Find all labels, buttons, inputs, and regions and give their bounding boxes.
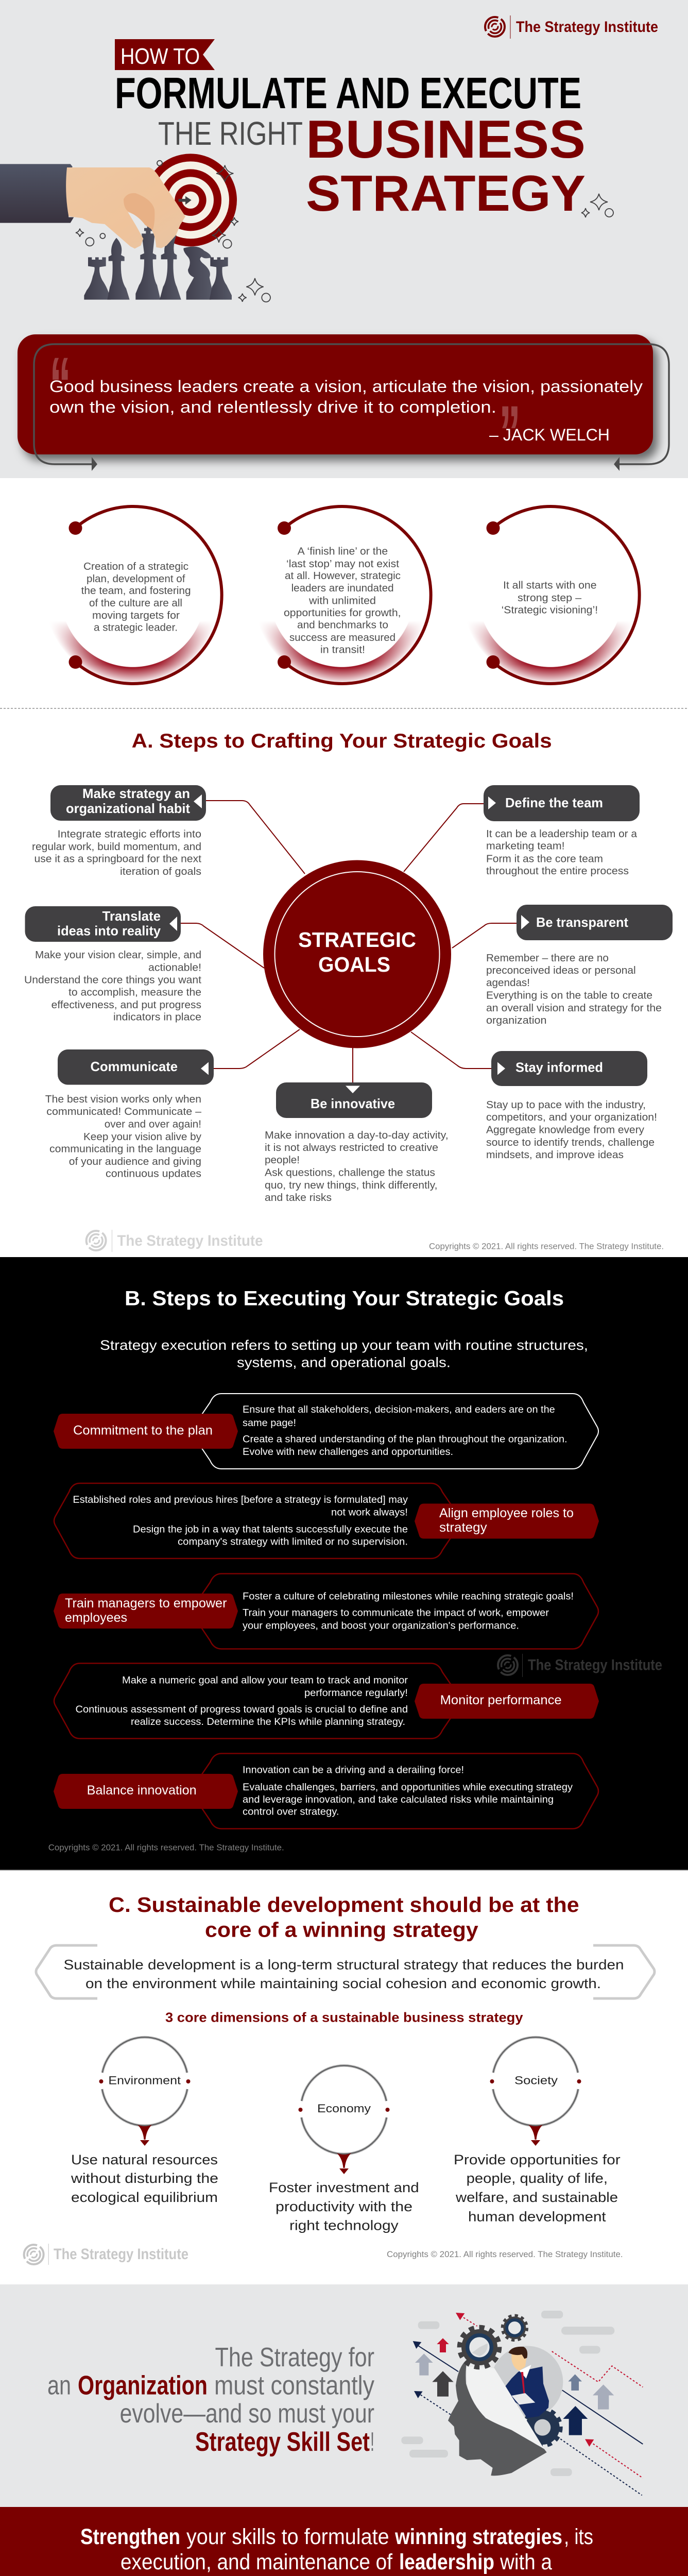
step: be innovative: and take risks: [265, 1192, 332, 1204]
step: communicate: Communicate: [91, 1059, 178, 1074]
man: [499, 2347, 549, 2418]
circle 2: finish line: A ‘finish line’ or the: [298, 546, 388, 557]
step: make strategy an organizational habit: iteration of goals: [120, 866, 201, 877]
heading: section C: C. Sustainable development should be at the: [109, 1893, 579, 1917]
dimension: environment: ecological equilibrium: [71, 2190, 218, 2205]
watermark logo C: The Strategy Institute: [54, 2246, 188, 2263]
intro text: systems, and operational goals.: [237, 1355, 451, 1370]
row: balance innovation: and leverage innovation, and take calculated risks while maintaining: [243, 1794, 554, 1805]
gears upper: [459, 2327, 500, 2367]
step: be transparent: Everything is on the table to create: [486, 990, 652, 1002]
step: be transparent: Be transparent: [536, 914, 628, 930]
dimension: economy: Economy: [317, 2102, 371, 2115]
row: align employee roles to strategy: company's strategy with limited or no supervision.: [178, 1536, 408, 1547]
row: balance innovation: Innovation can be a driving and a derailing force!: [243, 1765, 464, 1776]
circle 1: strategic leader: [44, 506, 222, 684]
step: make strategy an organizational habit: Make strategy an: [82, 786, 190, 801]
up arrows: [437, 2338, 449, 2352]
dimension: environment: without disturbing the: [71, 2171, 218, 2186]
step: make strategy an organizational habit: organizational habit: [66, 801, 190, 816]
heading: section C: [109, 1893, 579, 1941]
step: define the team: Define the team: [505, 795, 603, 810]
sparkles: [76, 161, 270, 302]
illustration: hand moving chess piece with target: [0, 154, 270, 302]
row: align employee roles to strategy: Established roles and previous hires [before a strategy is formulated] may: [73, 1495, 408, 1505]
circle 1: strategic leader: of the culture are all: [89, 598, 182, 609]
step: communicate: Keep your vision alive by: [83, 1131, 201, 1143]
dimension: economy: productivity with the: [276, 2199, 412, 2214]
panel: call to action: winning strategies: [394, 2524, 562, 2549]
step: define the team: Form it as the core team: [486, 853, 603, 865]
panel: call to action: execution, and maintenance of: [121, 2550, 393, 2574]
header panel: [0, 0, 688, 478]
row: align employee roles to strategy: strategy: [439, 1520, 487, 1535]
row: commitment to the plan: Commitment to the plan: [73, 1423, 213, 1438]
step: be transparent: Remember – there are no: [486, 953, 609, 964]
icon: chess pieces: [84, 225, 232, 300]
logo: The Strategy Institute: The Strategy Institute: [516, 19, 658, 36]
circle 2: finish line: and benchmarks to: [297, 620, 388, 631]
logo: The Strategy Institute: [485, 15, 658, 39]
callout: sustainable development definition: on the environment while maintaining social cohesion and economic growth.: [85, 1976, 601, 1991]
row: train managers to empower employees: your employees, and boost your organization's performance.: [243, 1621, 519, 1632]
dimension: economy: right technology: [289, 2217, 399, 2233]
step: translate ideas into reality: Translate: [102, 908, 161, 924]
row: commitment to the plan: Ensure that all stakeholders, decision-makers, and eaders are on the: [243, 1404, 555, 1415]
step: communicate: The best vision works only when: [45, 1094, 201, 1105]
circle 3: strategic visioning: ‘Strategic visioning’!: [502, 605, 598, 616]
evolve text: must constantly: [214, 2371, 374, 2401]
watermark logo A: [87, 1230, 263, 1252]
step: define the team: throughout the entire process: [486, 866, 629, 877]
row: commitment to the plan: Create a shared understanding of the plan throughout the organization.: [243, 1434, 567, 1445]
step: communicate: communicated! Communicate –: [46, 1106, 202, 1117]
step: communicate: of your audience and giving: [69, 1156, 201, 1167]
callout: sustainable development definition: [36, 1945, 655, 1998]
panel: call to action: [0, 2507, 688, 2576]
step: define the team: It can be a leadership team or a: [486, 828, 638, 840]
row: monitor performance: Continuous assessment of progress toward goals is crucial to define and: [75, 1704, 408, 1715]
watermark logo C: [24, 2244, 188, 2265]
quote panel: ”: [499, 389, 521, 476]
intro text: [100, 1337, 588, 1370]
panel: call to action: with a: [500, 2550, 552, 2574]
subheading: 3 core dimensions: 3 core dimensions of a sustainable business strategy: [165, 2010, 523, 2025]
circle 2: finish line: success are measured: [289, 632, 395, 643]
evolve text: Organization: [78, 2371, 208, 2401]
quote text: Good business leaders create a vision, articulate the vision, passionately: [49, 377, 643, 396]
step: translate ideas into reality: actionable!: [148, 962, 201, 973]
step: define the team: [484, 785, 640, 877]
step: be innovative: quo, try new things, think differently,: [265, 1180, 438, 1191]
row: train managers to empower employees: Train your managers to communicate the impact of work, empower: [243, 1608, 549, 1619]
circle 1: strategic leader: a strategic leader.: [94, 622, 178, 634]
dimension: society: human development: [468, 2209, 606, 2225]
row: commitment to the plan: same page!: [243, 1418, 296, 1429]
circle 1: strategic leader: plan, development of: [87, 573, 185, 585]
step: communicate: over and over again!: [105, 1119, 201, 1130]
circle 2: finish line: leaders are inundated: [291, 583, 394, 594]
step: be transparent: organization: [486, 1015, 547, 1026]
copyright A: Copyrights © 2021. All rights reserved. The Strategy Institute.: [429, 1242, 664, 1251]
watermark logo B: [498, 1654, 662, 1677]
circle 3: strategic visioning: strong step –: [518, 592, 582, 604]
decorative sparkles by title: [581, 194, 613, 217]
step: communicate: communicating in the language: [49, 1144, 201, 1155]
title: THE RIGHT: [158, 115, 303, 152]
dimension: environment: [71, 2037, 218, 2205]
central circle: strategic goals: [263, 860, 451, 1048]
row: monitor performance: performance regularly!: [304, 1688, 408, 1699]
step: stay informed: mindsets, and improve ideas: [486, 1149, 624, 1161]
circle 2: finish line: in transit!: [320, 645, 365, 656]
step: be transparent: preconceived ideas or personal: [486, 965, 636, 976]
row: balance innovation: [54, 1754, 598, 1829]
dimension: society: [454, 2037, 621, 2225]
watermark logo A: The Strategy Institute: [117, 1232, 263, 1249]
step: stay informed: competitors, and your organization!: [486, 1112, 657, 1123]
icon: hand: [66, 167, 185, 249]
evolve text: Strategy Skill Set: [195, 2427, 370, 2457]
step: be transparent: [486, 905, 673, 1026]
step: stay informed: Aggregate knowledge from every: [486, 1124, 644, 1136]
step: translate ideas into reality: ideas into reality: [57, 923, 161, 939]
step: be transparent: an overall vision and strategy for the: [486, 1003, 662, 1014]
title: STRATEGY: [306, 165, 586, 222]
row: align employee roles to strategy: Align employee roles to: [439, 1506, 574, 1520]
row: monitor performance: Make a numeric goal and allow your team to track and monitor: [122, 1675, 408, 1686]
step: translate ideas into reality: Understand the core things you want: [24, 975, 201, 986]
step: stay informed: Stay up to pace with the industry,: [486, 1099, 646, 1111]
panel: call to action: leadership: [399, 2550, 494, 2574]
circle 3: strategic visioning: [462, 506, 640, 684]
row: train managers to empower employees: Train managers to empower: [65, 1596, 227, 1611]
circle 3: strategic visioning: It all starts with one: [503, 580, 596, 591]
row: monitor performance: [54, 1663, 599, 1738]
step: translate ideas into reality: Make your vision clear, simple, and: [35, 950, 201, 961]
connector lines: [181, 801, 517, 1084]
intro text: Strategy execution refers to setting up your team with routine structures,: [100, 1337, 588, 1353]
dimension: society: Provide opportunities for: [454, 2152, 621, 2167]
central circle: strategic goals: GOALS: [318, 953, 390, 976]
step: be transparent: agendas!: [486, 977, 530, 989]
heading: section A: A. Steps to Crafting Your Strategic Goals: [132, 730, 552, 752]
step: make strategy an organizational habit: regular work, build momentum, and: [32, 841, 201, 853]
heading: section B: B. Steps to Executing Your Strategic Goals: [125, 1287, 564, 1310]
panel: call to action: your skills to formulate: [186, 2524, 389, 2549]
step: be innovative: it is not always restricted to creative: [265, 1142, 438, 1154]
row: train managers to empower employees: employees: [65, 1611, 127, 1625]
watermark logo B: The Strategy Institute: [528, 1657, 662, 1674]
background pills: [401, 2311, 614, 2476]
step: translate ideas into reality: indicators in place: [113, 1011, 201, 1023]
row: commitment to the plan: [54, 1394, 598, 1469]
step: make strategy an organizational habit: [32, 785, 206, 877]
evolve text: an: [47, 2371, 71, 2401]
circle 2: finish line: with unlimited: [308, 596, 376, 607]
dimension: society: Society: [514, 2074, 558, 2087]
dimension: environment: Use natural resources: [71, 2152, 218, 2167]
row: balance innovation: Evaluate challenges, barriers, and opportunities while executing strategy: [243, 1782, 573, 1793]
circle 2: finish line: [253, 506, 431, 684]
circle 1: strategic leader: the team, and fostering: [81, 585, 191, 597]
step: make strategy an organizational habit: use it as a springboard for the next: [34, 853, 201, 865]
dimension: economy: Foster investment and: [269, 2180, 419, 2195]
quote text: own the vision, and relentlessly drive it to completion.: [49, 398, 496, 416]
row: train managers to empower employees: [54, 1573, 598, 1649]
quote marks: “: [49, 341, 71, 428]
step: translate ideas into reality: [24, 906, 201, 1023]
copyright C: Copyrights © 2021. All rights reserved. The Strategy Institute.: [387, 2249, 623, 2259]
quote text: [49, 377, 643, 444]
circle 1: strategic leader: Creation of a strategic: [83, 561, 188, 572]
evolve text: !: [370, 2427, 374, 2457]
dimension: society: people, quality of life,: [467, 2171, 608, 2186]
row: monitor performance: Monitor performance: [440, 1693, 562, 1707]
heading: section C: core of a winning strategy: [205, 1918, 478, 1941]
title: HOW TO: [121, 44, 200, 69]
step: communicate: continuous updates: [106, 1168, 201, 1180]
evolve text: The Strategy for: [215, 2343, 374, 2372]
quote outline arrows: [34, 344, 669, 464]
step: stay informed: [486, 1051, 657, 1161]
quote text: – JACK WELCH: [489, 426, 610, 444]
trend lines: [417, 2317, 643, 2495]
step: stay informed: source to identify trends, challenge: [486, 1137, 655, 1148]
panel: call to action: , its: [564, 2524, 593, 2549]
step: translate ideas into reality: effectiveness, and put progress: [51, 999, 201, 1011]
panel: call to action: Strengthen: [80, 2524, 180, 2549]
step: translate ideas into reality: to accomplish, measure the: [68, 987, 201, 998]
evolve text: evolve—and so must your: [120, 2399, 374, 2429]
dimension: society: welfare, and sustainable: [455, 2190, 618, 2205]
step: communicate: [45, 1049, 214, 1180]
step: stay informed: Stay informed: [515, 1059, 603, 1075]
gear lower: [524, 2409, 561, 2446]
head silhouette and peel: [448, 2360, 547, 2476]
row: balance innovation: Balance innovation: [87, 1783, 197, 1798]
evolve text: [47, 2343, 374, 2457]
row: align employee roles to strategy: not work always!: [331, 1507, 408, 1518]
panel: section B: [0, 1257, 688, 1870]
title: BUSINESS: [306, 110, 586, 170]
row: monitor performance: realize success. Determine the KPIs while planning strategy.: [131, 1717, 405, 1727]
step: be innovative: Be innovative: [311, 1096, 395, 1111]
panel: evolve: [0, 2284, 688, 2507]
circle 2: finish line: at all. However, strategic: [285, 570, 401, 582]
step: be innovative: people!: [265, 1155, 300, 1166]
row: align employee roles to strategy: [54, 1483, 599, 1558]
step: be innovative: Make innovation a day-to-day activity,: [265, 1130, 449, 1141]
row: align employee roles to strategy: Design the job in a way that talents successfully execute the: [133, 1524, 408, 1535]
row: commitment to the plan: Evolve with new challenges and opportunities.: [243, 1447, 453, 1458]
circle 2: finish line: opportunities for growth,: [284, 607, 401, 619]
step: be innovative: [265, 1082, 449, 1204]
step: make strategy an organizational habit: Integrate strategic efforts into: [58, 828, 201, 840]
step: define the team: marketing team!: [486, 840, 564, 852]
illustration: strategist in a head with gears and arrows: [401, 2311, 643, 2495]
row: train managers to empower employees: Foster a culture of celebrating milestones while reaching strategic goals!: [243, 1591, 574, 1602]
quote panel: [18, 334, 669, 476]
step: be innovative: Ask questions, challenge the status: [265, 1167, 435, 1179]
dimension: environment: Environment: [108, 2074, 181, 2087]
row: balance innovation: control over strategy.: [243, 1807, 339, 1818]
callout: sustainable development definition: Sustainable development is a long-term structural strategy that reduces the burden: [64, 1957, 624, 1973]
central circle: strategic goals: STRATEGIC: [298, 928, 416, 952]
copyright B: Copyrights © 2021. All rights reserved. The Strategy Institute.: [48, 1843, 284, 1853]
circle 1: strategic leader: moving targets for: [92, 610, 180, 621]
icon: sleeve: [0, 164, 74, 223]
dimension: economy: [269, 2065, 419, 2233]
title: [115, 39, 586, 222]
gray circle behind man: [491, 2346, 563, 2418]
icon: target: [144, 154, 237, 246]
circle 2: finish line: ‘last stop’ may not exist: [286, 558, 399, 570]
